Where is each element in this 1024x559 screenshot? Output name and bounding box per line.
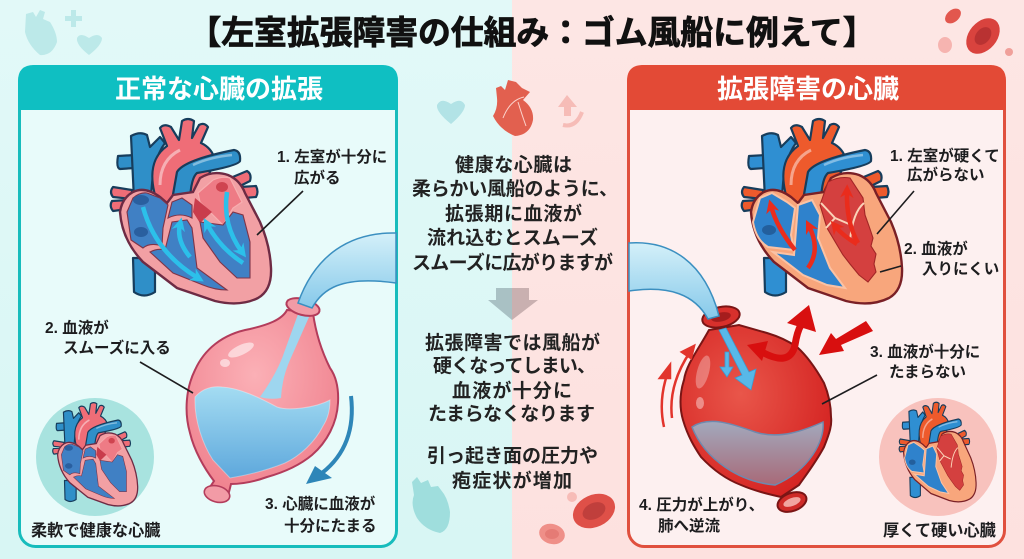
text block: explanation 3: 疱症状が増加 [452,469,572,492]
arrow: fill down [306,396,352,484]
water stream: normal [298,233,396,308]
label 2: 2. 血液が [904,239,968,258]
label 3: 十分にたまる [284,517,377,535]
label 2 [904,239,999,278]
text block: explanation 3: 引っ起き面の圧力や [427,445,598,467]
arrow: backflow to lungs [747,305,816,361]
heading: impaired: 拡張障害の心臓 [717,74,899,104]
text block: explanation 2: 拡張障害では風船が [425,331,600,354]
text block: explanation 2: 血液が十分に [452,379,572,402]
text block: explanation 2 [425,331,600,425]
icon: red heart centre [493,80,533,136]
icon: blood cells bottom [537,487,621,547]
label 3: 3. 血液が十分に [870,342,980,361]
label 3 [870,342,980,381]
balloon: normal [187,295,338,505]
flow arrows [143,192,243,278]
label 1 [277,147,387,187]
text block: explanation 1: 拡張期に血液が [445,202,582,225]
label 4: 4. 圧力が上がり、 [639,495,764,514]
label 3: たまらない [889,363,966,381]
callout line 1 [257,191,303,235]
arrow: grey down [488,288,538,320]
arrows: pressure rising [660,346,694,427]
inset caption: 厚くて硬い心臓 [883,522,997,540]
icon: pale heart top left [25,10,102,55]
icon: pale teal heart bottom [412,477,450,533]
label 1: 1. 左室が十分に [277,147,387,166]
label 2: 入りにくい [922,260,999,278]
heading: normal: 正常な心臓の拡張 [115,74,323,104]
panel: impaired heart [627,65,1006,546]
label 1 [890,146,1000,184]
arrows: inflow blocked [719,328,756,390]
label 1: 広がらない [907,165,985,184]
callout lines [877,191,914,272]
inset caption: 柔軟で健康な心臓 [31,521,161,540]
label 2: スムーズに入る [63,338,171,357]
label 1: 1. 左室が硬くて [890,146,1000,165]
inset: stiff heart [879,398,997,516]
water stream: stiff [629,243,719,319]
panel: normal heart [18,65,398,546]
title: 【左室拡張障害の仕組み：ゴム風船に例えて】 [188,14,876,51]
illustration: stiff heart [742,119,902,303]
text block: explanation 1 [412,154,618,274]
text block: explanation 3 [427,445,598,492]
text block: explanation 2: 硬くなってしまい、 [433,355,596,377]
label 3: 3. 心臓に血液が [265,494,376,513]
label 2 [45,318,171,357]
flow arrows [771,191,858,268]
icon: blood cells top right [938,6,1013,60]
label 4 [639,495,764,535]
text block: explanation 2: たまらなくなります [428,403,595,425]
callout line 3 [822,375,877,404]
illustration: normal heart [111,119,271,303]
inset: healthy heart [36,398,154,516]
text block: explanation 1: 健康な心臓は [455,154,572,176]
text block: explanation 1: スムーズに広がりますが [412,251,613,274]
icon: pale heart [437,101,465,124]
panel header [18,65,398,110]
callout line 2 [140,362,193,393]
text block: explanation 1: 流れ込むとスムーズ [427,226,598,249]
icon: pale arrow [558,95,582,125]
label 1: 広がる [294,168,341,187]
label 3 [265,494,377,535]
text block: explanation 1: 柔らかい風船のように、 [412,178,618,200]
balloon: stiff [680,303,831,516]
arrow: external pressure [819,321,873,355]
label 2: 2. 血液が [45,318,109,337]
label 4: 肺へ逆流 [658,517,721,535]
panel header [627,65,1006,110]
